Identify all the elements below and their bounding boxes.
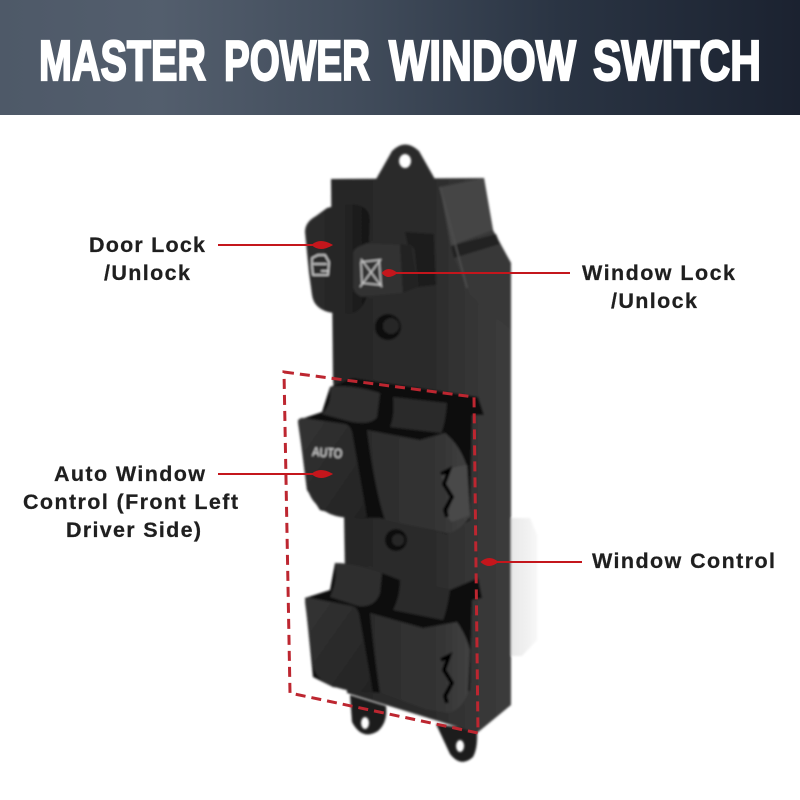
- window lock rocker: [353, 243, 418, 297]
- auto window switch: [298, 418, 367, 518]
- label: door lock: Door Lock: [89, 233, 205, 257]
- housing front: [331, 178, 511, 733]
- dashed outline: window control area: [284, 372, 478, 733]
- bottom mounting tabs: [350, 695, 386, 734]
- callout: door lock: [89, 233, 331, 285]
- arrow: window lock: [383, 270, 570, 276]
- title: POWER: [224, 29, 370, 93]
- callout: auto window control: [23, 462, 331, 542]
- label: auto window control: Driver Side): [66, 518, 201, 542]
- callout: window control: [482, 549, 775, 573]
- right window switch: [367, 430, 470, 533]
- center knob upper: [375, 314, 401, 340]
- housing upper facet: [440, 178, 493, 246]
- label: auto window control: Auto Window: [54, 462, 205, 486]
- top row switches: [298, 378, 484, 534]
- arrow: door lock: [218, 242, 331, 248]
- bottom row switches: [305, 563, 482, 713]
- label: door lock: /Unlock: [104, 261, 190, 285]
- window lock icon: [360, 259, 382, 287]
- callout: window lock: [383, 261, 735, 313]
- label: window lock: /Unlock: [611, 289, 697, 313]
- label: window control: Window Control: [592, 549, 775, 573]
- door lock icon: [312, 255, 329, 275]
- label: window lock: Window Lock: [582, 261, 735, 285]
- side recess: [405, 232, 436, 287]
- title: WINDOW: [389, 29, 576, 93]
- white connector behind the housing: [508, 518, 537, 656]
- product photo: master window switch: [298, 144, 537, 762]
- arrow: window control: [482, 559, 582, 565]
- header banner: [0, 0, 800, 115]
- door lock rocker: [305, 204, 370, 314]
- arrow: auto window control: [218, 471, 331, 477]
- top mounting tab: [375, 144, 436, 181]
- label: auto window control: Control (Front Left: [23, 490, 238, 514]
- title: MASTER: [39, 29, 206, 93]
- auto label: AUTO: [312, 444, 343, 461]
- center knob lower: [385, 529, 407, 551]
